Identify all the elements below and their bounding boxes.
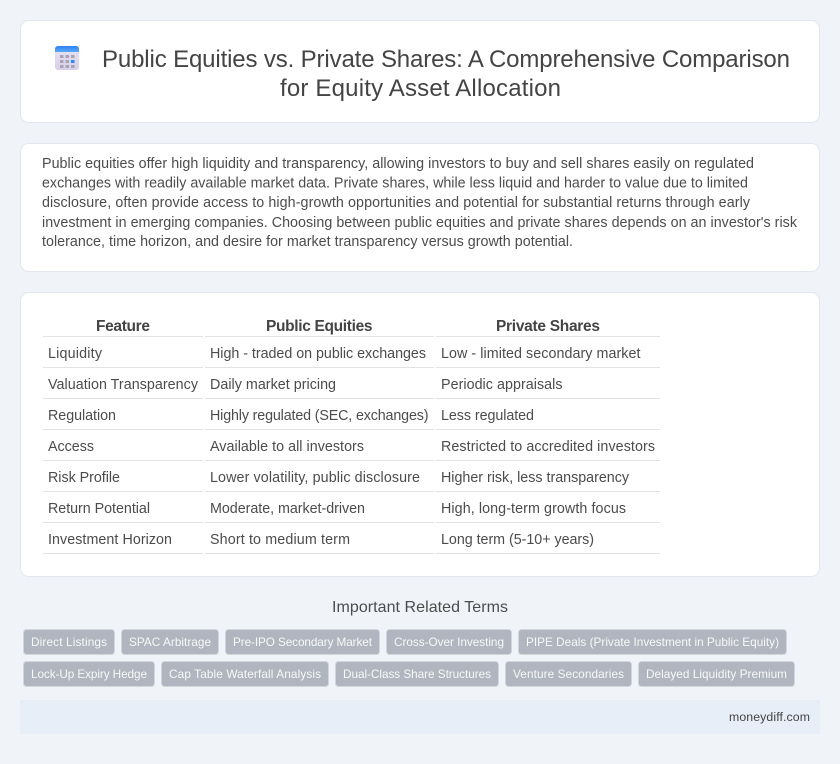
table rows: High - traded on public exchanges <box>210 346 426 362</box>
heading <box>102 46 790 102</box>
panel: comparison table <box>20 292 820 576</box>
panel: title <box>20 20 820 122</box>
tags: related terms: Dual-Class Share Structures <box>343 667 491 681</box>
text block: summary: Public equities offer high liquidity and transparency, allowing investors to buy and sell shares easily on regulated <box>42 156 754 172</box>
table rows: Long term (5-10+ years) <box>441 532 594 548</box>
tags: related terms: Venture Secondaries <box>513 667 624 681</box>
table grid lines <box>43 336 660 554</box>
table header: Public Equities <box>266 318 372 335</box>
tags: related terms: SPAC Arbitrage <box>129 635 211 649</box>
table rows: Daily market pricing <box>210 377 336 393</box>
table header: Feature <box>96 318 150 335</box>
table rows: Short to medium term <box>210 532 350 548</box>
table rows: Investment Horizon <box>48 532 172 548</box>
table rows: Risk Profile <box>48 470 120 486</box>
footer: moneydiff.com <box>729 710 810 724</box>
table rows: Lower volatility, public disclosure <box>210 470 420 486</box>
table rows: Available to all investors <box>210 439 364 455</box>
panel: summary <box>20 144 820 272</box>
table header <box>96 318 600 335</box>
tags: related terms: Cross-Over Investing <box>394 635 504 649</box>
tags: related terms: Pre-IPO Secondary Market <box>233 635 373 649</box>
table rows: Moderate, market-driven <box>210 501 365 517</box>
table rows: Less regulated <box>441 408 534 424</box>
text block: summary: exchanges with readily available market data. Private shares, while less liquid and harder to value due to limited <box>42 176 748 192</box>
tags: related terms: Cap Table Waterfall Analysis <box>169 667 321 681</box>
table rows: Restricted to accredited investors <box>441 439 655 455</box>
table rows <box>48 346 655 548</box>
tags: related terms: Direct Listings <box>31 635 107 649</box>
heading: Public Equities vs. Private Shares: A Comprehensive Comparison <box>102 46 790 73</box>
table rows: Return Potential <box>48 501 150 517</box>
text block: summary: tolerance, time horizon, and desire for market transparency versus growth potential. <box>42 234 573 250</box>
table rows: Higher risk, less transparency <box>441 470 630 486</box>
text block: summary <box>42 156 798 250</box>
heading: related terms: Important Related Terms <box>332 599 508 616</box>
text block: summary: disclosure, often provide access to high-growth opportunities and potential for substantial returns through early <box>42 195 751 211</box>
table rows: High, long-term growth focus <box>441 501 626 517</box>
tags: related terms: Lock-Up Expiry Hedge <box>31 667 147 681</box>
tags: related terms: Delayed Liquidity Premium <box>646 667 787 681</box>
text block: summary: investment in emerging companies. Choosing between public equities and private shares depends on an investor's risk <box>42 215 798 231</box>
table header: Private Shares <box>496 318 600 335</box>
icon: calendar <box>55 46 79 70</box>
table rows: Regulation <box>48 408 116 424</box>
tags: related terms: PIPE Deals (Private Investment in Public Equity) <box>526 635 779 649</box>
table rows: Access <box>48 439 94 455</box>
table rows: Periodic appraisals <box>441 377 562 393</box>
tags: related terms <box>24 630 794 686</box>
table rows: Valuation Transparency <box>48 377 199 393</box>
footer <box>20 700 820 734</box>
table rows: Liquidity <box>48 346 103 362</box>
table rows: Low - limited secondary market <box>441 346 641 362</box>
table rows: Highly regulated (SEC, exchanges) <box>210 408 428 424</box>
heading: for Equity Asset Allocation <box>280 75 561 102</box>
